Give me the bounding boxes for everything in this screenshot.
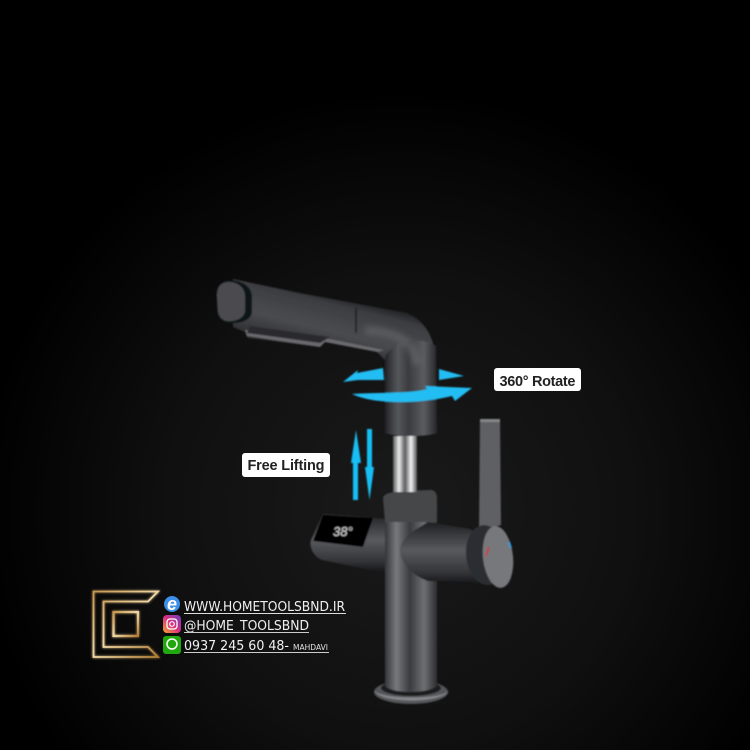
chrome riser [393, 436, 417, 492]
label: 360 rotate [494, 368, 581, 391]
icon: website [164, 594, 180, 614]
phone text: 0937 245 60 48- [184, 638, 289, 654]
label: free lifting: Free Lifting [248, 458, 324, 474]
icon: instagram [163, 615, 181, 633]
website text: WWW.HOMETOOLSBND.IR [184, 599, 345, 615]
label: 360 rotate: 360° Rotate [500, 374, 576, 390]
faucet base [374, 680, 449, 704]
instagram text: @HOME_TOOLSBND [184, 618, 309, 634]
faucet body column [385, 498, 437, 692]
handle [463, 419, 516, 589]
bend highlight [365, 330, 417, 365]
icon: website: e [167, 594, 177, 614]
lever cylinder [400, 522, 490, 585]
lift arrows [351, 429, 374, 500]
rotate arrows [343, 368, 472, 402]
collar [383, 490, 437, 522]
label: free lifting [242, 453, 330, 477]
spout neck [385, 341, 437, 436]
temperature reading: 38° [333, 524, 353, 539]
spray head and bend [216, 279, 435, 360]
icon: whatsapp [163, 636, 181, 654]
faucet [216, 279, 516, 704]
logo [94, 592, 158, 657]
phone text: MAHDAVI [293, 643, 328, 652]
display housing [310, 513, 385, 573]
